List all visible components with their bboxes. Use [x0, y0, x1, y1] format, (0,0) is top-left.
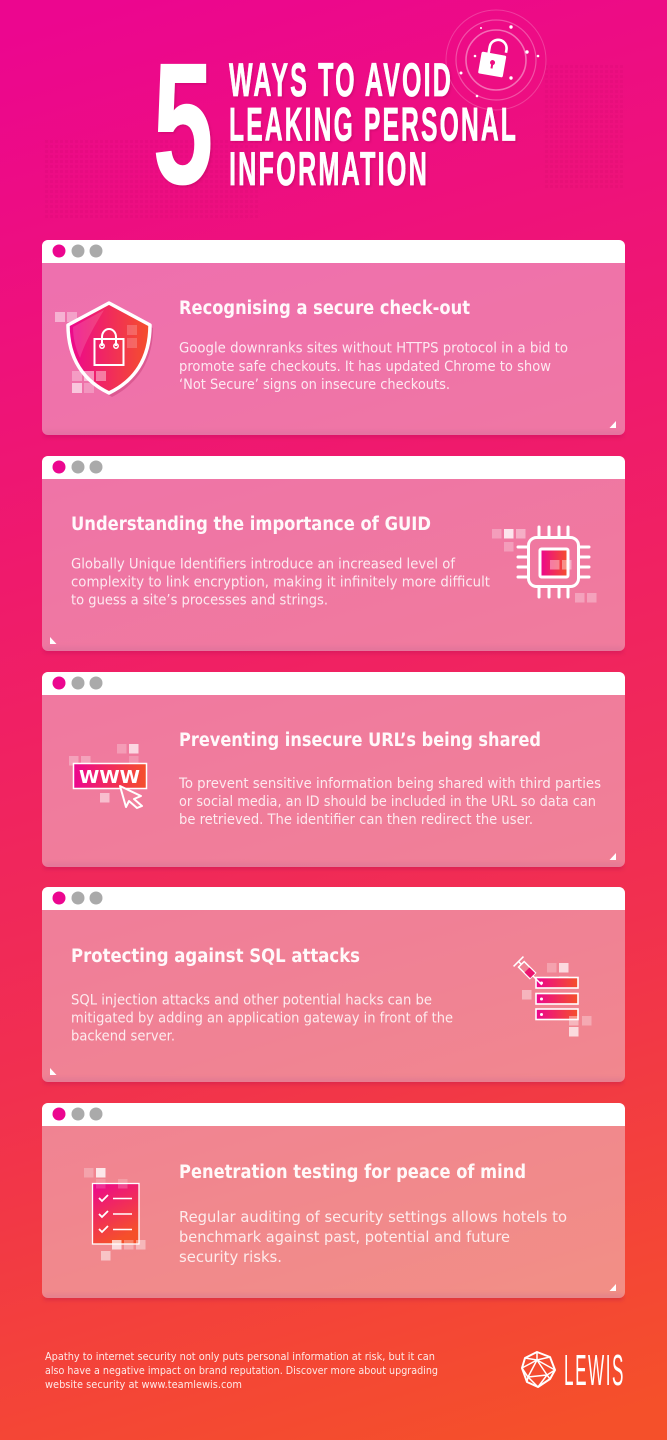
body text — [179, 1208, 567, 1266]
body text — [71, 556, 490, 608]
panel: secure check-out — [42, 240, 625, 437]
body text: Globally Unique Identifiers introduce an increased level of — [71, 556, 456, 572]
panel: SQL attacks — [42, 887, 625, 1084]
big number 5: 5 — [153, 28, 213, 220]
body text: security risks. — [179, 1248, 282, 1266]
heading: Recognising a secure check-out — [179, 298, 470, 319]
icon: www cursor — [69, 744, 146, 808]
title line 3: INFORMATION — [229, 142, 429, 195]
body text: SQL injection attacks and other potential hacks can be — [71, 992, 432, 1008]
body text: Regular auditing of security settings allows hotels to — [179, 1208, 567, 1226]
heading: Preventing insecure URL’s being shared — [179, 730, 541, 751]
body text: be retrieved. The identifier can then redirect the user. — [179, 812, 533, 828]
icon: syringe and server — [514, 957, 592, 1036]
body text: To prevent sensitive information being shared with third parties — [178, 776, 601, 792]
body text — [71, 992, 453, 1044]
body text: promote safe checkouts. It has updated Chrome to show — [179, 359, 551, 375]
body text — [178, 776, 601, 828]
footer text: website security at www.teamlewis.com — [45, 1379, 242, 1391]
icon: padlock with rings — [446, 10, 546, 110]
body text: complexity to link encryption, making it infinitely more difficult — [71, 574, 490, 590]
body text: to guess a site’s processes and strings. — [71, 592, 328, 608]
icon: www cursor: WWW — [79, 767, 140, 788]
icon: checklist — [84, 1168, 146, 1260]
body text: Google downranks sites without HTTPS protocol in a bid to — [179, 340, 568, 356]
logo: Lewis — [522, 1346, 625, 1395]
title — [153, 28, 518, 220]
heading: Understanding the importance of GUID — [71, 514, 431, 535]
body text: or social media, an ID should be included in the URL so data can — [179, 794, 596, 810]
footer text — [45, 1351, 438, 1391]
panel: insecure URLs — [42, 672, 625, 869]
body text: benchmark against past, potential and future — [179, 1228, 510, 1246]
panel: penetration testing — [42, 1103, 625, 1300]
heading: Penetration testing for peace of mind — [179, 1162, 526, 1183]
body text: backend server. — [71, 1028, 175, 1044]
body text — [179, 340, 568, 393]
panel: GUID — [42, 456, 625, 653]
body text: ‘Not Secure’ signs on insecure checkouts. — [179, 377, 450, 393]
icon: shield with shopping bag — [55, 303, 153, 397]
title line 1: WAYS TO AVOID — [229, 53, 453, 106]
icon: polyhedron — [522, 1352, 555, 1387]
icon: microchip — [492, 527, 596, 602]
heading: Protecting against SQL attacks — [71, 946, 360, 967]
footer text: also have a negative impact on brand reputation. Discover more about upgrading — [45, 1365, 438, 1377]
body text: mitigated by adding an application gateway in front of the — [71, 1010, 453, 1026]
footer text: Apathy to internet security not only puts personal information at risk, but it can — [45, 1351, 435, 1363]
background dot patterns — [45, 65, 623, 218]
